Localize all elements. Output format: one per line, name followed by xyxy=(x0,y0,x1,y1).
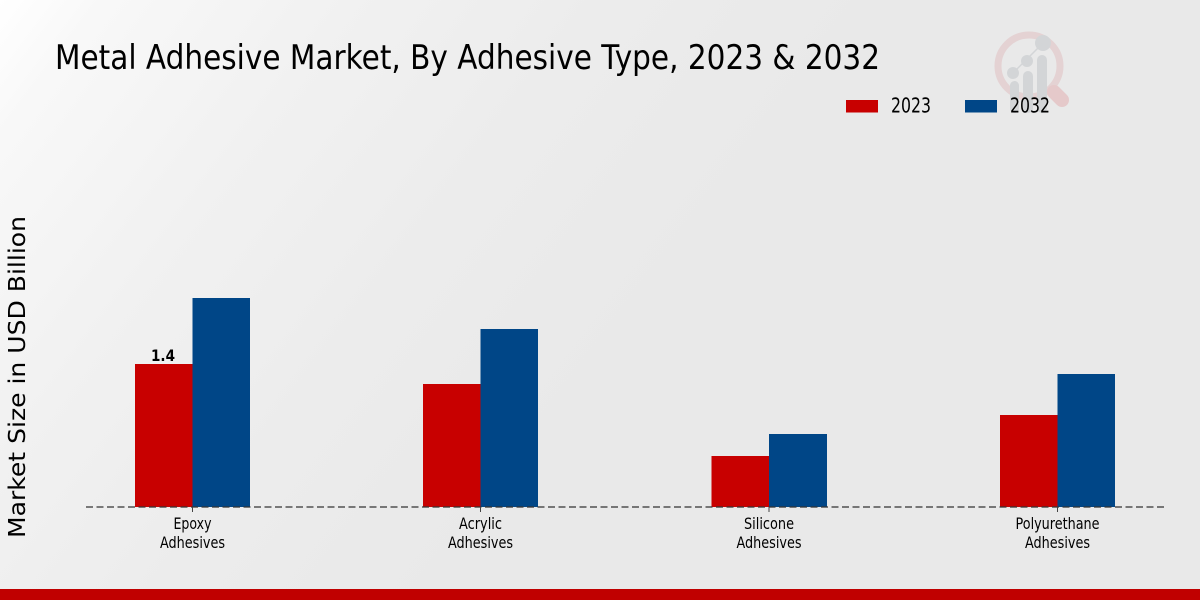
category label: Acrylic Adhesives: Acrylic xyxy=(459,514,502,533)
icon: watermark logo xyxy=(998,35,1062,113)
category label: Epoxy Adhesives: Epoxy xyxy=(174,514,212,533)
bar chart xyxy=(86,298,1164,512)
category label: Silicone Adhesives: Adhesives xyxy=(736,533,802,552)
category label: Polyurethane Adhesives xyxy=(1016,514,1100,552)
bars: Polyurethane Adhesives xyxy=(1000,374,1115,507)
y-axis label: Market Size in USD Billion xyxy=(5,216,31,538)
legend item: 2032: 2032 xyxy=(1010,94,1050,118)
bars: Silicone Adhesives xyxy=(712,434,827,507)
category label: Silicone Adhesives xyxy=(736,514,802,552)
bars: Acrylic Adhesives xyxy=(423,329,538,507)
category label: Epoxy Adhesives xyxy=(160,514,225,552)
bars: Epoxy Adhesives xyxy=(135,298,250,507)
category label: Acrylic Adhesives: Adhesives xyxy=(448,533,513,552)
footer bar xyxy=(0,589,1200,600)
legend item: 2032 xyxy=(965,94,1050,118)
category label: Silicone Adhesives: Silicone xyxy=(744,514,794,533)
legend xyxy=(846,94,1050,118)
category label: Epoxy Adhesives: Adhesives xyxy=(160,533,225,552)
category label: Polyurethane Adhesives: Adhesives xyxy=(1025,533,1090,552)
legend item: 2023 xyxy=(846,94,931,118)
category label: Acrylic Adhesives xyxy=(448,514,513,552)
title: Metal Adhesive Market, By Adhesive Type, 2023 & 2032 xyxy=(55,38,880,78)
legend item: 2023: 2023 xyxy=(891,94,931,118)
category label: Polyurethane Adhesives: Polyurethane xyxy=(1016,514,1100,533)
data label: 1.4: 1.4 xyxy=(151,346,175,365)
